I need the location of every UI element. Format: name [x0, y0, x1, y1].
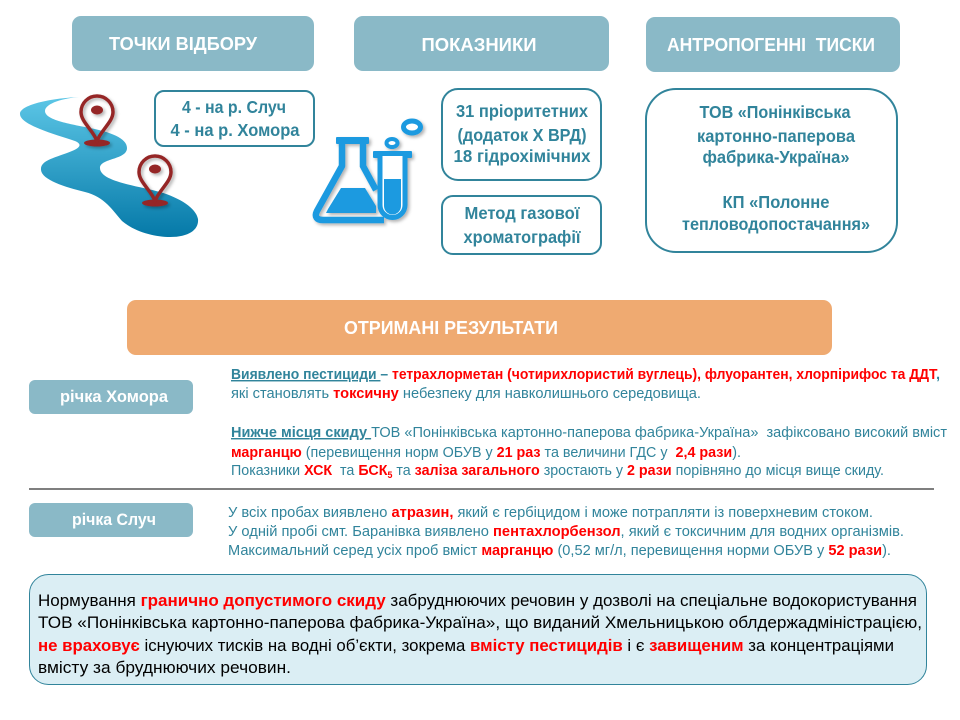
callout: висновок: Нормування гранично допустимого скиду забруднюючих речовин у дозволі на спеціальне водокористування [38, 591, 917, 610]
box: пріоритетні показники: 31 пріоритетних [456, 101, 588, 121]
text block: Хомора: Нижче місця скиду ТОВ «Понінківська картонно-паперова фабрика-Україна» зафіксовано високий вміст [231, 425, 947, 441]
callout: висновок: не враховує існуючих тисків на водні об’єкти, зокрема вмісту пестицидів і є завищеним за концентраціями [38, 636, 894, 655]
text block: Случ [228, 505, 904, 559]
heading: антропогенні тиски: АНТРОПОГЕННІ ТИСКИ [667, 34, 875, 55]
pin 2 [139, 156, 171, 206]
pin 1 [81, 96, 113, 146]
box: пріоритетні показники: 18 гідрохімічних [454, 146, 591, 166]
label: річка Хомора [29, 380, 193, 414]
box: кількість точок [155, 91, 314, 146]
heading: отримані результати: ОТРИМАНІ РЕЗУЛЬТАТИ [344, 317, 558, 338]
text block: Хомора: марганцю (перевищення норм ОБУВ у 21 раз та величини ГДС у 2,4 рази). [231, 445, 741, 461]
heading: точки відбору: ТОЧКИ ВІДБОРУ [109, 33, 257, 54]
label: річка Хомора: річка Хомора [60, 388, 169, 406]
text block: Случ: Максимальний серед усіх проб вміст марганцю (0,52 мг/л, перевищення норми ОБУВ у 52 рази). [228, 543, 891, 559]
text block: Хомора: Виявлено пестициди – тетрахлорметан (чотирихлористий вуглець), флуорантен, хлорпірифос та ДДТ, [231, 367, 940, 383]
box: метод [442, 196, 601, 254]
icon: flask and test tube [316, 121, 420, 220]
callout: висновок: вмісту за бруднюючих речовин. [38, 658, 291, 677]
box: підприємства: тепловодопостачання» [682, 214, 870, 234]
text block: Хомора: 5 [387, 470, 392, 480]
text block: Хомора: заліза загального зростають у 2 рази порівняно до місця вище скиду. [415, 463, 887, 479]
river [20, 97, 198, 237]
heading: точки відбору [72, 16, 314, 71]
box: підприємства: картонно-паперова [697, 126, 855, 146]
text block: Хомора [231, 367, 947, 480]
box: кількість точок: 4 - на р. Хомора [170, 120, 300, 140]
box: метод: Метод газової [464, 203, 581, 223]
callout: висновок: ТОВ «Понінківська картонно-паперова фабрика-Україна», що виданий Хмельницькою облдержадміністрацією, [38, 613, 922, 632]
label: річка Случ: річка Случ [72, 511, 156, 529]
bubbles [386, 139, 398, 147]
callout: висновок [30, 574, 926, 684]
text block: Случ: У всіх пробах виявлено атразин, який є гербіцидом і може потрапляти із поверхневим стоком. [228, 505, 873, 521]
box: метод: хроматографії [464, 227, 582, 247]
text block: Случ: У одній пробі смт. Баранівка виявлено пентахлорбензол, який є токсичним для водних організмів. [228, 524, 904, 540]
heading: отримані результати [127, 300, 832, 355]
box: пріоритетні показники: (додаток Х ВРД) [458, 125, 586, 145]
box: підприємства: КП «Полонне [722, 192, 830, 212]
flask [316, 140, 384, 220]
heading: показники [354, 16, 609, 71]
box: підприємства: ТОВ «Понінківська [700, 102, 851, 122]
box: кількість точок: 4 - на р. Случ [182, 97, 286, 117]
text block: Хомора: та [392, 463, 415, 479]
text block: Хомора: які становлять токсичну небезпеку для навколишнього середовища. [231, 386, 701, 402]
test tube [373, 151, 412, 158]
box: пріоритетні показники [442, 89, 601, 180]
icon: river with location pins [20, 96, 198, 237]
heading: антропогенні тиски [646, 17, 900, 72]
text block: Хомора: Показники ХСК та БСК [231, 463, 388, 479]
heading: показники: ПОКАЗНИКИ [422, 34, 536, 55]
box: підприємства: фабрика-Україна» [702, 147, 850, 167]
box: підприємства [646, 89, 897, 252]
label: річка Случ [29, 503, 193, 537]
